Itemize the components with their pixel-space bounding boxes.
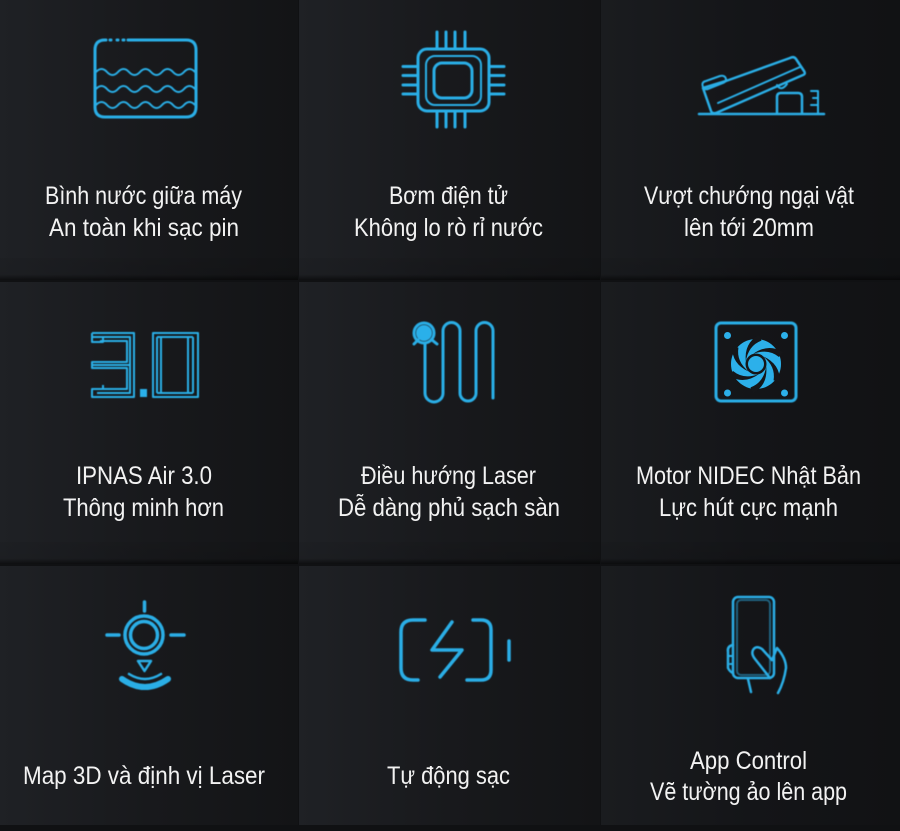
text: water tank caption: An toàn khi sạc pin — [49, 214, 239, 242]
text: app caption: Vẽ tường ảo lên app — [650, 778, 847, 806]
panel: app control — [601, 566, 900, 825]
icon: laser positioning — [107, 602, 184, 687]
text: obstacle caption: lên tới 20mm — [684, 214, 814, 242]
icon: water tank — [95, 40, 196, 117]
text: charging caption: Tự động sạc — [387, 762, 510, 790]
panel: auto charging — [299, 566, 600, 825]
text: laser caption: Điều hướng Laser — [361, 462, 536, 490]
panel: electronic pump — [299, 0, 600, 280]
text: laser caption: Dễ dàng phủ sạch sàn — [338, 493, 560, 522]
text: motor caption: Motor NIDEC Nhật Bản — [636, 462, 861, 490]
text: map caption: Map 3D và định vị Laser — [23, 762, 265, 790]
text: pump caption — [354, 182, 543, 242]
panel: water tank — [0, 0, 298, 280]
text: app caption: App Control — [690, 747, 807, 775]
text: pump caption: Bơm điện tử — [389, 182, 508, 210]
panel: IPNAS Air 3.0 — [0, 282, 298, 564]
text: pump caption: Không lo rò rỉ nước — [354, 214, 543, 242]
panel: laser navigation — [299, 282, 600, 564]
text: motor caption: Lực hút cực mạnh — [659, 494, 838, 522]
icon: laser path — [414, 322, 493, 402]
text: water tank caption — [45, 182, 242, 242]
panel: NIDEC motor — [601, 282, 900, 564]
icon: robot climbing obstacle — [699, 57, 824, 114]
icon: 3.0 — [92, 333, 198, 397]
text: water tank caption: Bình nước giữa máy — [45, 182, 242, 210]
icon: battery charging — [401, 620, 509, 680]
text: motor caption — [636, 462, 861, 522]
icon: phone in hand — [728, 597, 786, 693]
text: IPNAS caption: IPNAS Air 3.0 — [76, 462, 212, 490]
text: IPNAS caption: Thông minh hơn — [63, 494, 224, 522]
text: laser caption — [338, 462, 560, 522]
panel: obstacle climbing — [601, 0, 900, 280]
icon: fan — [716, 323, 796, 401]
text: obstacle caption — [644, 182, 854, 242]
text: IPNAS caption — [63, 462, 224, 522]
panel: 3D map — [0, 566, 298, 825]
text: app caption — [650, 747, 847, 806]
text: obstacle caption: Vượt chướng ngại vật — [644, 182, 854, 210]
icon: chip — [403, 32, 504, 127]
